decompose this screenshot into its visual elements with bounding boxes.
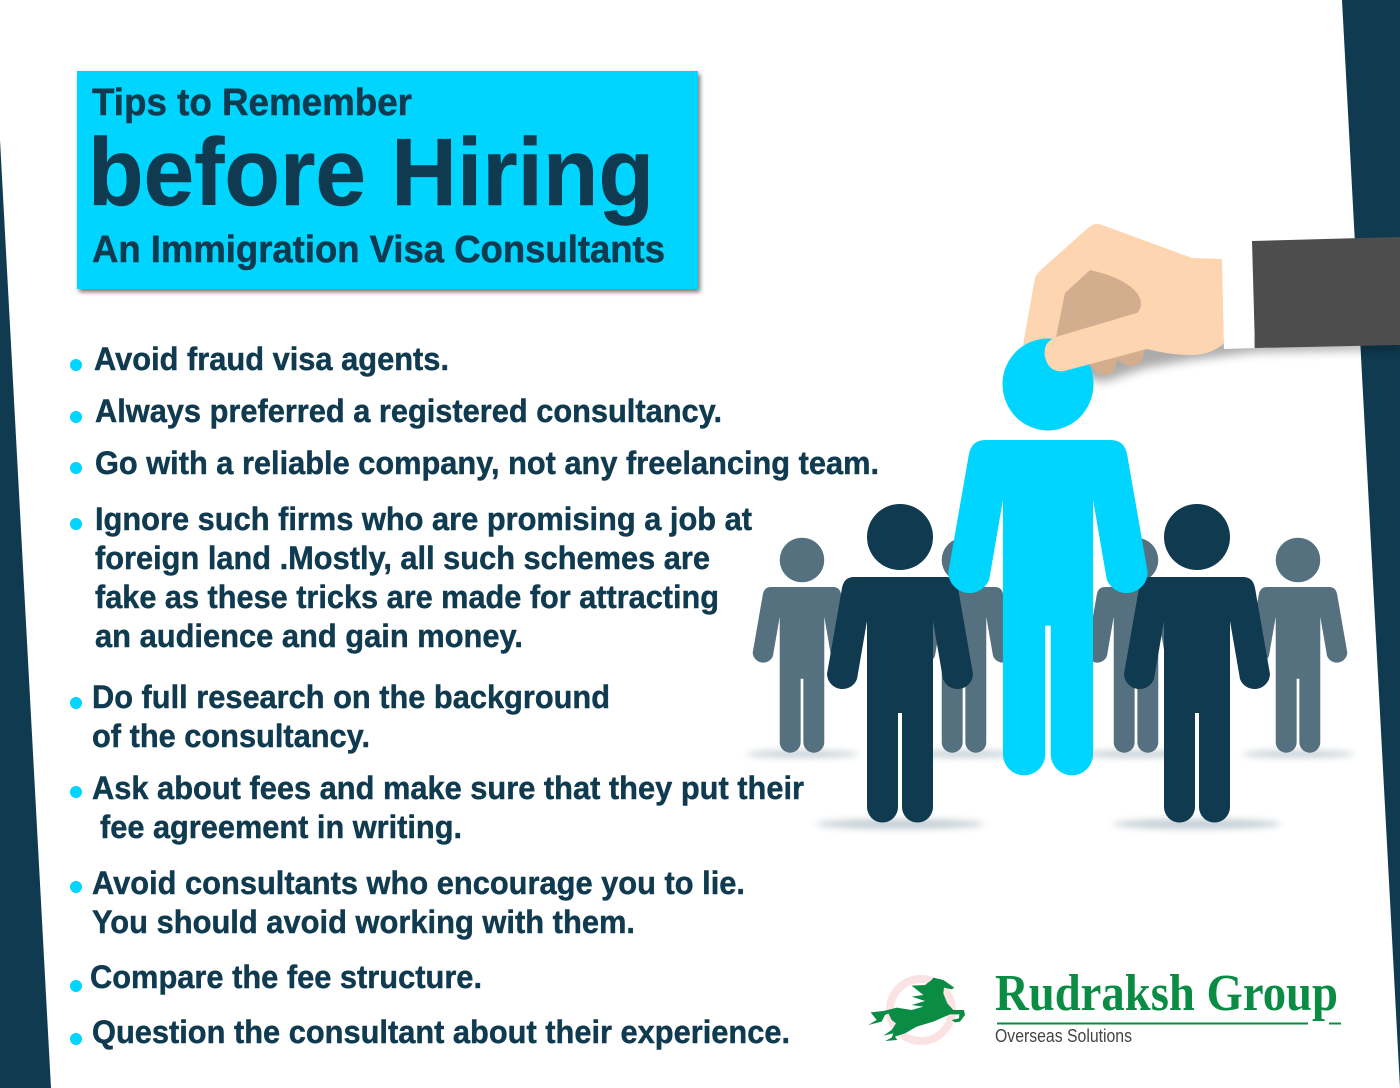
tip 5: Do full research on the background	[92, 679, 610, 715]
tip 7: You should avoid working with them.	[92, 904, 635, 940]
logo ring	[890, 979, 952, 1041]
back of hand	[1023, 224, 1224, 355]
sleeve shadow	[1060, 340, 1400, 382]
title line: An Immigration Visa Consultants: An Immigration Visa Consultants	[92, 229, 665, 271]
tip 3: Go with a reliable company, not any freelancing team.	[95, 445, 879, 481]
tip 1: Avoid fraud visa agents.	[94, 341, 449, 377]
logo wordmark: Rudraksh Group	[995, 965, 1338, 1022]
tip 4	[70, 501, 752, 654]
title panel	[77, 71, 700, 292]
tip 9: Question the consultant about their experience.	[92, 1014, 790, 1050]
shirt cuff	[1222, 251, 1254, 349]
left navy side band	[0, 140, 51, 1088]
middle row people	[827, 504, 1270, 822]
tip 7	[70, 865, 745, 940]
logo tagline: Overseas Solutions	[995, 1026, 1132, 1046]
tip 6: fee agreement in writing.	[100, 809, 462, 845]
thumb	[1045, 313, 1160, 371]
logo underline	[997, 1022, 1341, 1024]
tips list	[70, 341, 879, 1050]
tip 5: of the consultancy.	[92, 718, 370, 754]
tip 4: foreign land .Mostly, all such schemes are	[95, 540, 710, 576]
suit sleeve	[1252, 237, 1400, 348]
title line: before Hiring: before Hiring	[88, 119, 654, 226]
chosen blue person	[948, 340, 1148, 775]
tip 6	[70, 770, 804, 845]
ground shadows	[746, 750, 1354, 829]
fingers	[1088, 345, 1146, 375]
back row people	[753, 538, 1347, 753]
shaded palm	[1056, 270, 1141, 337]
tip 4: Ignore such firms who are promising a job at	[95, 501, 752, 537]
tip 7: Avoid consultants who encourage you to lie.	[92, 865, 745, 901]
tip 5	[70, 679, 610, 754]
head of blue person	[1002, 338, 1094, 430]
title line: Tips to Remember: Tips to Remember	[92, 82, 412, 124]
logo: Rudraksh Group	[868, 965, 1341, 1046]
tip 4: an audience and gain money.	[95, 618, 523, 654]
tip 4: fake as these tricks are made for attracting	[95, 579, 719, 615]
people illustration	[746, 340, 1354, 829]
tip 8: Compare the fee structure.	[90, 959, 482, 995]
tip 6: Ask about fees and make sure that they put their	[92, 770, 804, 806]
tip 2: Always preferred a registered consultancy.	[95, 393, 722, 429]
hand in suit picking the person	[1002, 224, 1400, 430]
logo horse	[868, 978, 965, 1041]
right navy side band	[1342, 0, 1400, 1088]
